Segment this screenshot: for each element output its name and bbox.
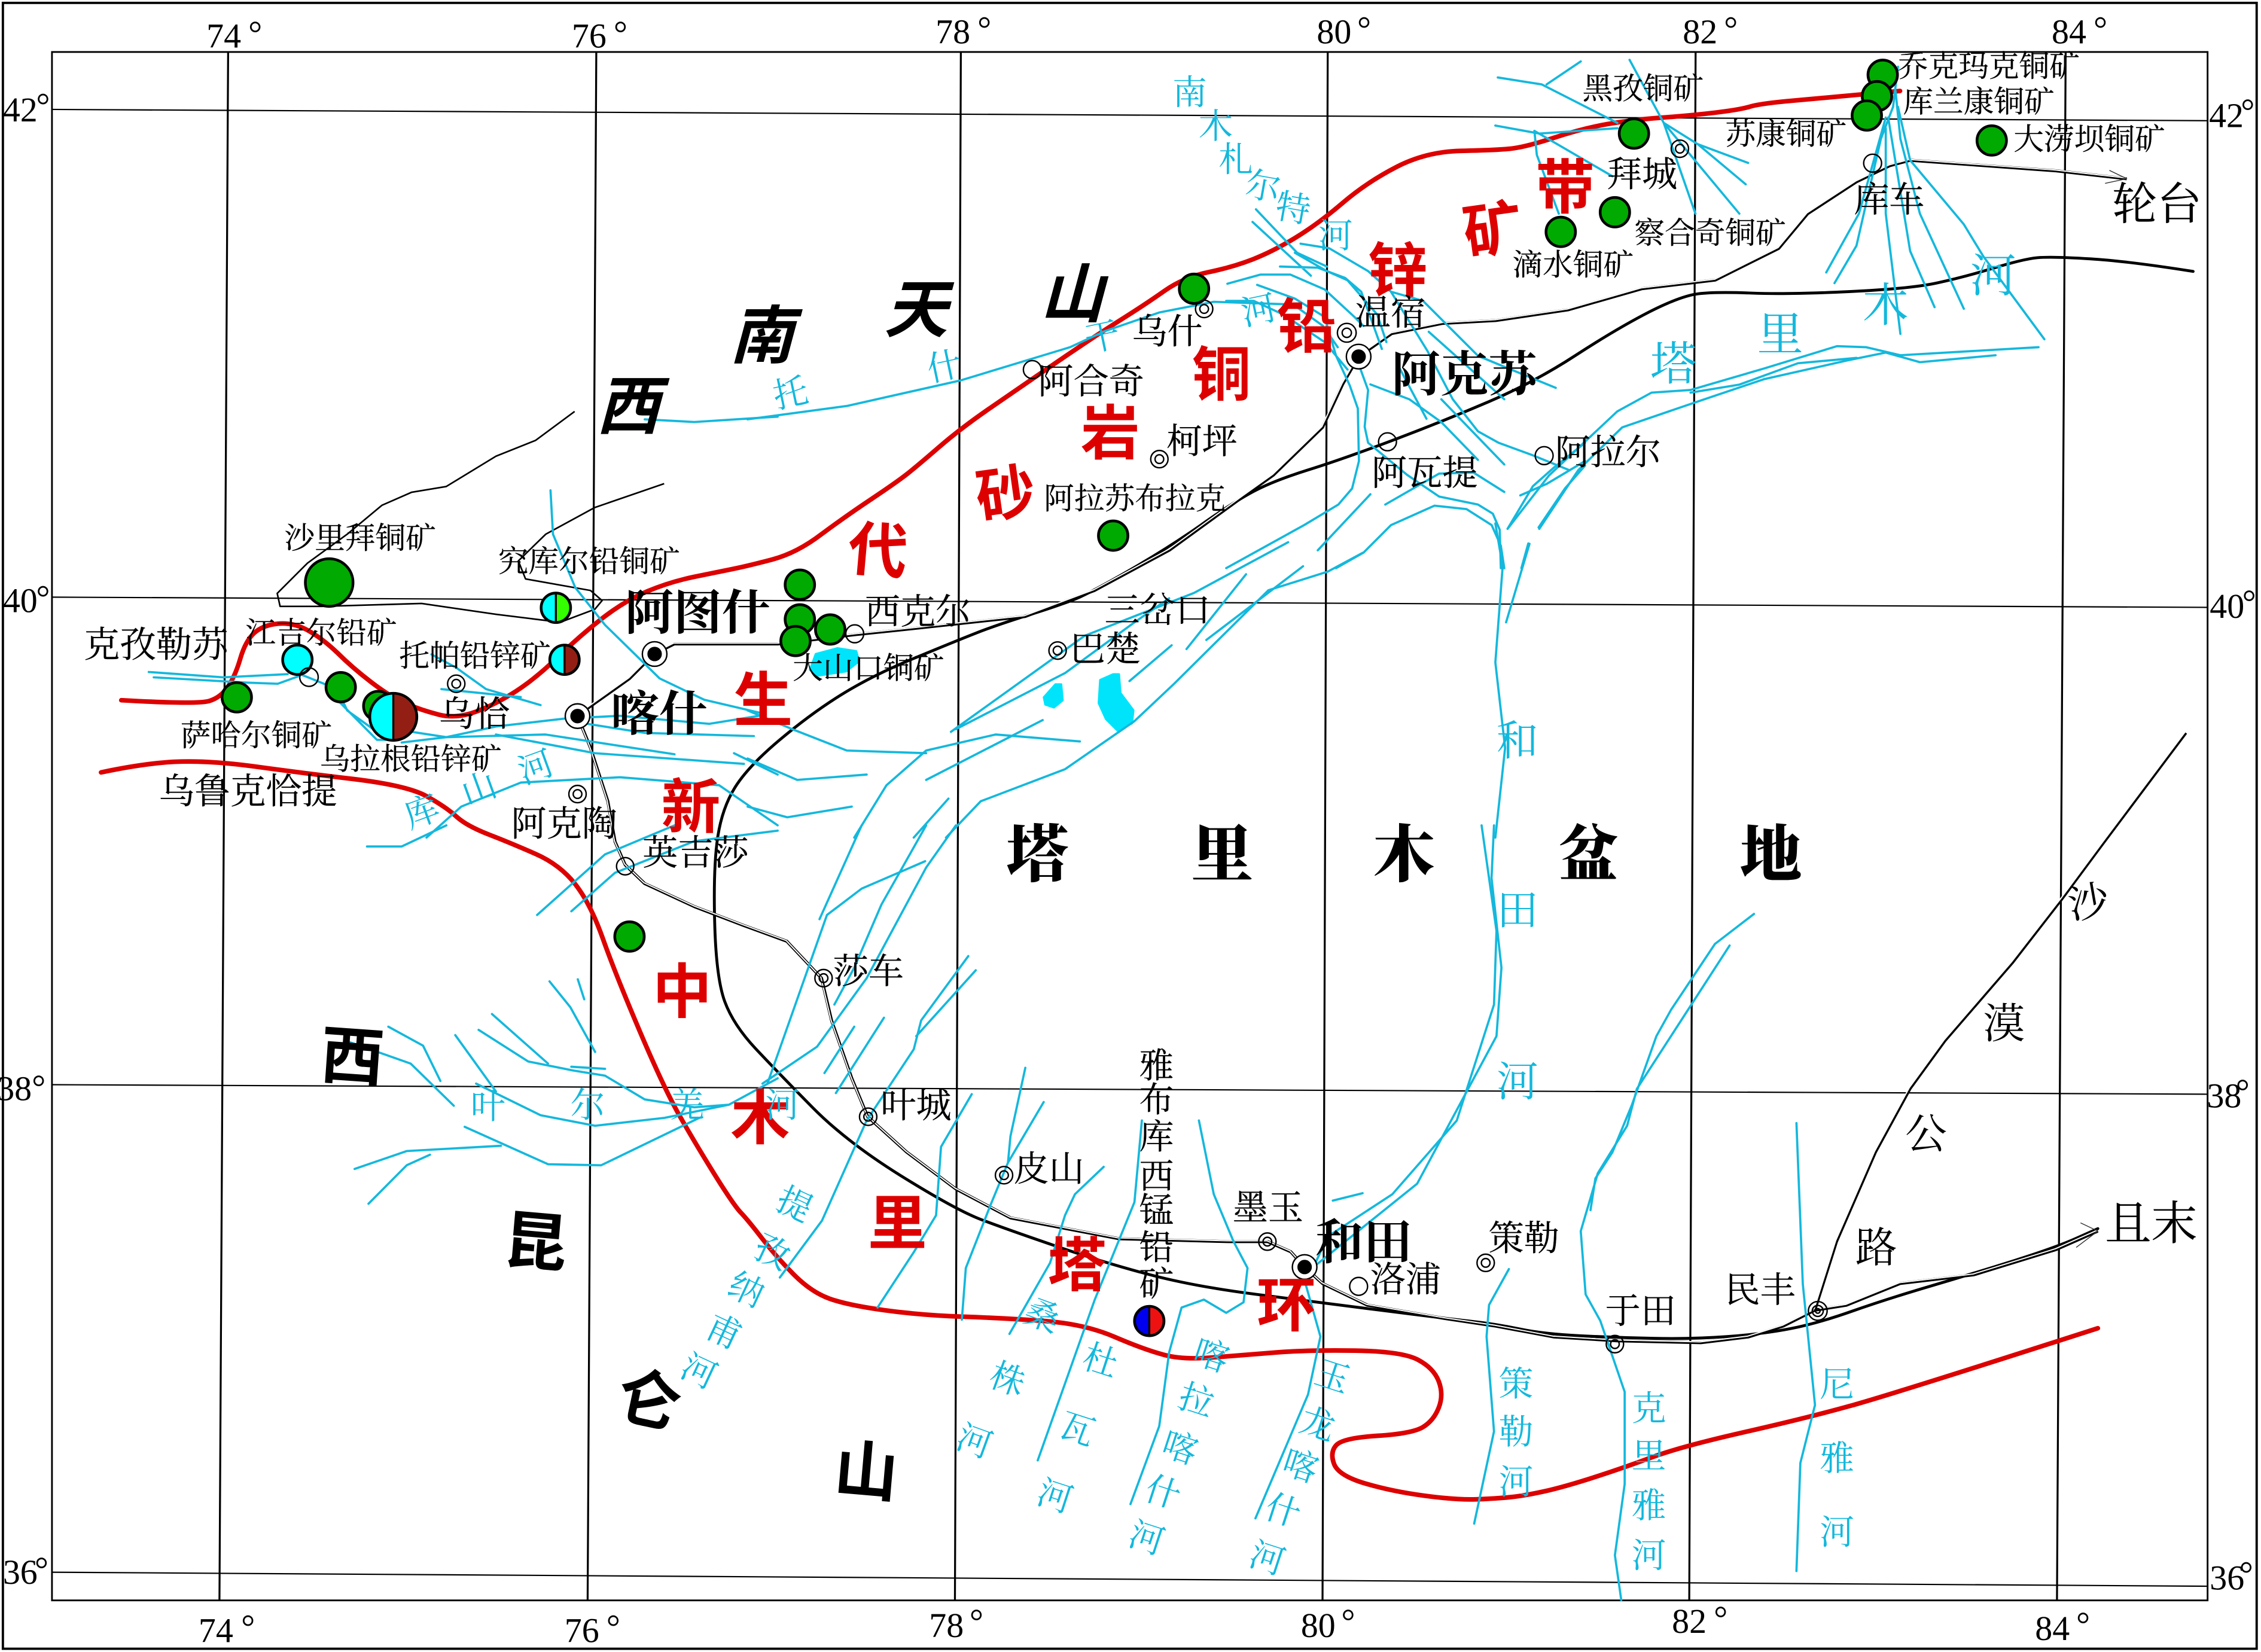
desert highway label — [1855, 877, 2114, 1272]
main highway: cased road lines — [577, 160, 2127, 1343]
major city labels: 喀什 — [611, 688, 708, 741]
label: Keriya River: 雅 — [1632, 1486, 1666, 1525]
label: Tuoshigan River: 托 — [770, 371, 812, 416]
mine: copper near Yingjisha — [615, 922, 644, 951]
rivers: Tuoshigan and central north tributaries — [748, 302, 1363, 837]
town labels: 皮山 — [1013, 1149, 1084, 1188]
West Kunlun label: 山 — [831, 1434, 901, 1510]
town labels: 乌什 — [1132, 312, 1203, 351]
label: Yurungkash River: 什 — [1260, 1487, 1306, 1535]
town labels: 于田 — [1605, 1291, 1676, 1331]
town: Ahechi — [1023, 361, 1041, 379]
rivers: Yarkand headwaters — [345, 825, 778, 1204]
label: Tizinafu River — [675, 1179, 818, 1397]
label: Yurungkash River — [1245, 1353, 1355, 1583]
town labels: 三岔口 — [1105, 590, 1211, 630]
axis labels: longitude and latitude: 80 — [1317, 12, 1351, 51]
label: Keriya River: 里 — [1632, 1437, 1666, 1476]
label: Sangzhu River: 株 — [985, 1355, 1031, 1404]
mine name labels: 萨哈尔铜矿 — [181, 719, 332, 752]
label: Hotan River: 田 — [1497, 888, 1538, 934]
town labels: 英吉莎 — [642, 833, 749, 873]
mine name labels: 苏康铜矿 — [1725, 117, 1846, 151]
West Kunlun label — [318, 1020, 901, 1510]
mine: Yabuku west manganese-lead — [1135, 1306, 1164, 1336]
town: Akto — [569, 785, 586, 803]
desert highway label: 公 — [1905, 1112, 1947, 1158]
axis labels: longitude and latitude: ° — [2236, 1072, 2250, 1111]
town: Keping — [1151, 450, 1168, 468]
label: Kushan River — [399, 743, 559, 836]
vertical label: Yabuku west manganese-lead mine: 锰 — [1139, 1191, 1174, 1230]
town labels: 且末 — [2105, 1198, 2198, 1249]
town labels: 洛浦 — [1370, 1260, 1441, 1299]
label: Yarkand River: 叶 — [471, 1087, 505, 1126]
mine: Jiangjier lead — [283, 645, 312, 675]
axis labels: longitude and latitude: ° — [970, 1602, 983, 1641]
red belt name along the belt: 岩 — [1081, 400, 1140, 467]
label: Yarkand River: 羌 — [670, 1086, 705, 1124]
label: Yurungkash River: 龙 — [1295, 1400, 1340, 1448]
label: Sangzhu River — [952, 1292, 1065, 1466]
city: Hotan — [1293, 1255, 1317, 1279]
town: Minfeng — [1808, 1302, 1827, 1320]
rivers: Aksu confluence — [1226, 209, 1585, 568]
label: Kushan River: 库 — [399, 788, 445, 836]
label: Hotan River: 和 — [1497, 718, 1538, 764]
label: Tarim River: 里 — [1757, 309, 1803, 360]
town labels: 柯坪 — [1166, 422, 1238, 461]
axis labels: longitude and latitude: 74 — [206, 17, 241, 56]
label: Karakash River: 拉 — [1174, 1377, 1218, 1424]
label: Nanmuzhaerte River: 尔 — [1243, 164, 1284, 209]
label: Yarkand River — [471, 1086, 800, 1126]
axis labels: longitude and latitude: ° — [2094, 10, 2107, 48]
mine: Sukang copper — [1852, 100, 1882, 130]
label: Nanmuzhaerte River: 河 — [1318, 217, 1353, 255]
mine: Kulankang copper — [1862, 81, 1892, 111]
axis labels: longitude and latitude: ° — [1714, 1599, 1727, 1638]
town labels: 乌恰 — [439, 694, 510, 734]
label: Tuoshigan River — [770, 288, 1279, 416]
label: Tizinafu River: 河 — [675, 1346, 723, 1397]
town: Cele — [1477, 1254, 1494, 1272]
rivers: Tarim and Kuqa tributaries — [1495, 60, 2044, 837]
axis labels: longitude and latitude: ° — [36, 86, 50, 125]
axis labels: longitude and latitude: ° — [36, 578, 50, 617]
red belt name along the belt: 砂 — [972, 458, 1040, 531]
axis labels: longitude and latitude: ° — [1724, 10, 1738, 48]
town labels — [84, 154, 2202, 1331]
town labels: 轮台 — [2112, 180, 2202, 230]
label: Yurungkash River: 玉 — [1310, 1353, 1355, 1401]
town: Baicheng — [1671, 140, 1689, 157]
axis labels: longitude and latitude: 40 — [3, 581, 38, 620]
axis labels: longitude and latitude: ° — [1357, 10, 1371, 48]
vertical label: Yabuku west manganese-lead mine: 库 — [1139, 1117, 1174, 1156]
mineral deposit markers — [222, 60, 2006, 1336]
Tarim Basin label: 木 — [1373, 822, 1435, 890]
town labels: 莎车 — [833, 952, 904, 991]
city: Aksu — [1346, 345, 1371, 369]
mine name labels: 乔克玛克铜矿 — [1898, 50, 2080, 83]
town: Yutian — [1606, 1336, 1623, 1353]
town: near Jiangjier — [300, 668, 318, 687]
label: Kushan River: 山 — [456, 764, 502, 813]
axis labels: longitude and latitude: 42 — [3, 90, 38, 129]
label: Yurungkash River: 喀 — [1278, 1442, 1323, 1490]
rivers: western Kashgar and Kunlun tributaries — [149, 417, 778, 837]
major city labels: 阿图什 — [625, 587, 770, 640]
label: Karakash River: 喀 — [1189, 1332, 1233, 1380]
label: Karakash River: 河 — [1124, 1514, 1169, 1562]
mine name labels: 阿拉苏布拉克 — [1044, 482, 1226, 516]
mine name labels: 大涝坝铜矿 — [2013, 123, 2165, 156]
label: Kushan River: 河 — [513, 743, 559, 791]
town labels: 阿瓦提 — [1372, 453, 1477, 493]
town: Wuqia — [447, 675, 465, 693]
lakes — [810, 648, 1133, 730]
town: Yecheng — [860, 1108, 877, 1126]
mine: unnamed copper near Jiangjier — [326, 672, 355, 702]
mine: Tuopa lead-zinc — [550, 645, 579, 675]
desert highway label: 漠 — [1983, 1002, 2025, 1048]
label: Tarim River — [1650, 251, 2016, 390]
mine: Shaliba copper — [306, 559, 353, 606]
label: Hotan River — [1497, 718, 1538, 1105]
mine name labels: 大山口铜矿 — [793, 651, 944, 685]
mine name labels: 江吉尔铅矿 — [245, 617, 397, 650]
red belt name along the belt: 生 — [733, 667, 793, 734]
axis labels: longitude and latitude: 74 — [199, 1611, 233, 1650]
town: Yingjisha — [617, 858, 634, 875]
mountain range names — [318, 259, 1119, 1510]
red belt name along the belt: 塔 — [1047, 1232, 1107, 1299]
mine: Wulagen lead-zinc — [370, 693, 417, 740]
axis labels: longitude and latitude: ° — [241, 1608, 255, 1647]
label: Cele River — [1499, 1364, 1533, 1501]
Tarim Basin label: 盆 — [1557, 822, 1619, 890]
vertical label: Yabuku west manganese-lead mine: 雅 — [1139, 1047, 1174, 1086]
label: Karakash River: 喀 — [1157, 1424, 1202, 1472]
mine: Wushi copper — [1180, 274, 1209, 303]
major city labels: 阿克苏 — [1392, 349, 1541, 402]
town labels: 墨玉 — [1233, 1188, 1303, 1228]
town: Luopu — [1349, 1278, 1367, 1296]
axis labels: longitude and latitude: 82 — [1683, 12, 1717, 51]
town labels: 叶城 — [880, 1086, 952, 1125]
red belt name along the belt: 代 — [845, 515, 910, 586]
label: Nanmuzhaerte River — [1172, 73, 1353, 255]
West Kunlun label: 仑 — [610, 1360, 687, 1442]
label: Niya River: 尼 — [1820, 1366, 1854, 1404]
town labels: 乌鲁克恰提 — [159, 772, 337, 811]
mine: Chahechi copper — [1600, 197, 1629, 227]
axis labels: longitude and latitude: 78 — [929, 1606, 964, 1645]
label: Tarim River: 木 — [1863, 280, 1909, 331]
label: Sangzhu River: 河 — [952, 1418, 997, 1466]
axis labels: longitude and latitude: ° — [607, 1608, 620, 1647]
red belt name along the belt: 里 — [868, 1190, 927, 1257]
mine name labels: 黑孜铜矿 — [1583, 72, 1704, 106]
major city labels: 和田 — [1315, 1217, 1412, 1270]
mine: Alasu Bulake copper — [1098, 521, 1128, 550]
label: Tizinafu River: 孜 — [748, 1227, 796, 1278]
label: Keriya River: 克 — [1632, 1389, 1666, 1428]
axis labels: longitude and latitude: 76 — [565, 1611, 599, 1650]
label: Yurungkash River: 河 — [1245, 1535, 1290, 1583]
label: Nanmuzhaerte River: 特 — [1273, 187, 1314, 231]
vertical label: Yabuku west manganese-lead mine: 铅 — [1139, 1229, 1174, 1267]
town: Shache — [815, 970, 832, 987]
label: Cele River: 河 — [1499, 1462, 1533, 1501]
label: Karakash River: 什 — [1141, 1469, 1186, 1517]
mine name labels: 滴水铜矿 — [1512, 248, 1634, 282]
axis labels: longitude and latitude: 36 — [3, 1553, 38, 1592]
mine: Heizi copper — [1619, 119, 1648, 148]
town: Bachu — [1049, 642, 1066, 659]
town: Kuche — [1864, 154, 1882, 172]
axis labels: longitude and latitude: ° — [2242, 583, 2256, 621]
axis labels: longitude and latitude: 80 — [1301, 1606, 1336, 1645]
town: Pishan — [995, 1166, 1013, 1184]
desert highway label: 沙 — [2065, 877, 2114, 928]
label: Tuoshigan River: 什 — [924, 344, 965, 389]
mine: Dishui copper — [1546, 217, 1576, 246]
label: Duwa River — [1032, 1337, 1123, 1520]
label: Tizinafu River: 纳 — [722, 1265, 770, 1315]
label: Duwa River: 杜 — [1078, 1337, 1123, 1385]
axis labels: longitude and latitude: ° — [614, 14, 627, 53]
label: Cele River: 勒 — [1499, 1413, 1533, 1452]
town labels: 阿克陶 — [511, 804, 617, 844]
axis labels: longitude and latitude: ° — [35, 1550, 48, 1589]
red belt name along the belt: 带 — [1535, 154, 1595, 221]
label: Tarim River: 河 — [1970, 251, 2016, 302]
red belt name along the belt: 铅 — [1277, 293, 1336, 359]
label: Sangzhu River: 桑 — [1019, 1292, 1065, 1340]
axis labels: longitude and latitude: ° — [32, 1068, 45, 1107]
red belt name along the belt: 环 — [1257, 1272, 1316, 1339]
red belt name along the belt: 新 — [662, 774, 720, 840]
vertical label: Yabuku west manganese-lead mine — [1139, 1047, 1174, 1304]
label: Tarim River: 塔 — [1650, 339, 1696, 390]
mine: Jiukuer lead-copper — [541, 593, 571, 623]
city: Kashgar — [565, 704, 590, 729]
west boundary thin outline — [277, 412, 664, 622]
town labels: 阿合奇 — [1038, 362, 1144, 401]
West Tianshan label: 西 — [592, 371, 675, 442]
mine name labels — [181, 50, 2165, 1304]
label: Niya River: 河 — [1820, 1513, 1854, 1552]
label: Keriya River: 河 — [1632, 1537, 1666, 1575]
mine name labels: 察合奇铜矿 — [1634, 217, 1786, 250]
red belt name along the belt: 中 — [653, 959, 712, 1025]
label: Keriya River — [1632, 1389, 1666, 1575]
axis labels: longitude and latitude: 40 — [2210, 587, 2244, 626]
river name labels — [399, 73, 2016, 1583]
red belt name along the belt: 矿 — [1459, 193, 1527, 267]
town: Awati — [1379, 433, 1397, 451]
West Tianshan label: 天 — [880, 275, 963, 345]
mine name labels: 乌拉根铅锌矿 — [320, 743, 502, 776]
label: Tizinafu River: 提 — [770, 1179, 818, 1230]
label: Niya River: 雅 — [1820, 1439, 1854, 1478]
axis labels: longitude and latitude: 78 — [936, 12, 970, 51]
town labels: 克孜勒苏 — [84, 625, 229, 665]
axis labels: longitude and latitude: 84 — [2035, 1609, 2070, 1648]
rivers: Keriya and Niya — [1581, 914, 1815, 1600]
axis labels: longitude and latitude: ° — [2241, 92, 2254, 130]
town labels: 巴楚 — [1070, 630, 1141, 669]
railway: thick black line — [714, 257, 2193, 1339]
vertical label: Yabuku west manganese-lead mine: 西 — [1139, 1157, 1174, 1196]
town labels: 库车 — [1854, 180, 1925, 220]
town labels: 西克尔 — [865, 592, 971, 632]
label: Tuoshigan River: 干 — [1081, 315, 1123, 360]
red belt name along the belt: 锌 — [1368, 237, 1427, 304]
label: Duwa River: 河 — [1032, 1473, 1077, 1520]
town: Wushi — [1196, 300, 1213, 318]
axis labels: longitude and latitude: 82 — [1672, 1602, 1707, 1641]
county-town markers — [300, 140, 1882, 1353]
label: Cele River: 策 — [1499, 1364, 1533, 1403]
Tarim Basin label: 里 — [1191, 822, 1253, 890]
mine: Dalaoba copper — [1977, 126, 2006, 155]
mine: Qiaokemake copper — [1868, 60, 1897, 90]
West Tianshan label: 山 — [1036, 259, 1119, 330]
axis labels: longitude and latitude: ° — [1341, 1602, 1355, 1641]
label: Nanmuzhaerte River: 札 — [1218, 140, 1253, 179]
major city labels — [611, 349, 1541, 1270]
axis labels: longitude and latitude: ° — [248, 14, 262, 53]
West Kunlun label: 西 — [318, 1020, 386, 1095]
red belt name along the belt: 铜 — [1192, 342, 1251, 408]
West Kunlun label: 昆 — [501, 1205, 570, 1281]
axis labels: longitude and latitude: 84 — [2052, 12, 2086, 51]
label: Niya River — [1820, 1366, 1854, 1552]
Tarim Basin label: 地 — [1740, 822, 1802, 890]
mine: Sahaer copper — [222, 682, 251, 712]
desert highway — [1814, 732, 2186, 1310]
desert highway label: 路 — [1855, 1226, 1897, 1272]
mine name labels: 托帕铅锌矿 — [399, 639, 551, 673]
axis labels: longitude and latitude: ° — [2076, 1605, 2090, 1644]
label: Yarkand River: 河 — [765, 1086, 800, 1124]
label: Nanmuzhaerte River: 南 — [1172, 73, 1207, 112]
axis labels: longitude and latitude: 38 — [2207, 1076, 2241, 1115]
West Tianshan label — [592, 259, 1119, 442]
label: Tuoshigan River: 河 — [1238, 288, 1279, 333]
mine name labels: 库兰康铜矿 — [1903, 85, 2055, 118]
town: Alaer — [1535, 447, 1553, 465]
mine name labels: 究库尔铅铜矿 — [498, 545, 680, 578]
label: Karakash River — [1124, 1332, 1233, 1562]
town: Xikeer — [846, 625, 864, 643]
label: Tizinafu River: 甫 — [700, 1307, 748, 1357]
axis labels: longitude and latitude: 36 — [2210, 1559, 2244, 1598]
label: Yarkand River: 尔 — [570, 1086, 605, 1124]
vertical label: Yabuku west manganese-lead mine: 布 — [1139, 1081, 1174, 1120]
axis labels: longitude and latitude: 42 — [2209, 96, 2244, 135]
rivers: southern Kunlun rivers — [763, 825, 1509, 1523]
town: Wensu — [1337, 324, 1356, 342]
town labels: 民丰 — [1725, 1270, 1796, 1310]
mine: Dashankou copper cluster — [781, 570, 845, 656]
red belt name along the belt — [653, 154, 1595, 1339]
label: Hotan River: 河 — [1497, 1059, 1538, 1105]
Tarim Basin label — [1006, 822, 1802, 890]
Tarim Basin label: 塔 — [1006, 822, 1068, 890]
label: Duwa River: 瓦 — [1055, 1406, 1099, 1453]
town labels: 策勒 — [1489, 1218, 1559, 1258]
mine: copper beside Wulagen — [364, 691, 393, 721]
town labels: 温宿 — [1355, 293, 1426, 333]
axis labels: longitude and latitude: ° — [977, 10, 991, 48]
town labels: 拜城 — [1607, 154, 1677, 194]
southern copper-lead-zinc belt boundary — [101, 761, 2098, 1499]
axis labels: longitude and latitude: ° — [2239, 1554, 2253, 1593]
axis labels: longitude and latitude: 76 — [572, 17, 607, 56]
label: Nanmuzhaerte River: 木 — [1198, 107, 1233, 146]
West Tianshan label: 南 — [726, 300, 809, 371]
northern copper-lead-zinc belt boundary — [121, 91, 1900, 717]
vertical label: Yabuku west manganese-lead mine: 矿 — [1139, 1265, 1174, 1304]
town: Moyu — [1259, 1233, 1276, 1250]
mine name labels: 沙里拜铜矿 — [285, 522, 436, 555]
town labels: 阿拉尔 — [1555, 432, 1661, 472]
city: Artux — [642, 642, 667, 666]
red belt name along the belt: 木 — [730, 1085, 790, 1151]
